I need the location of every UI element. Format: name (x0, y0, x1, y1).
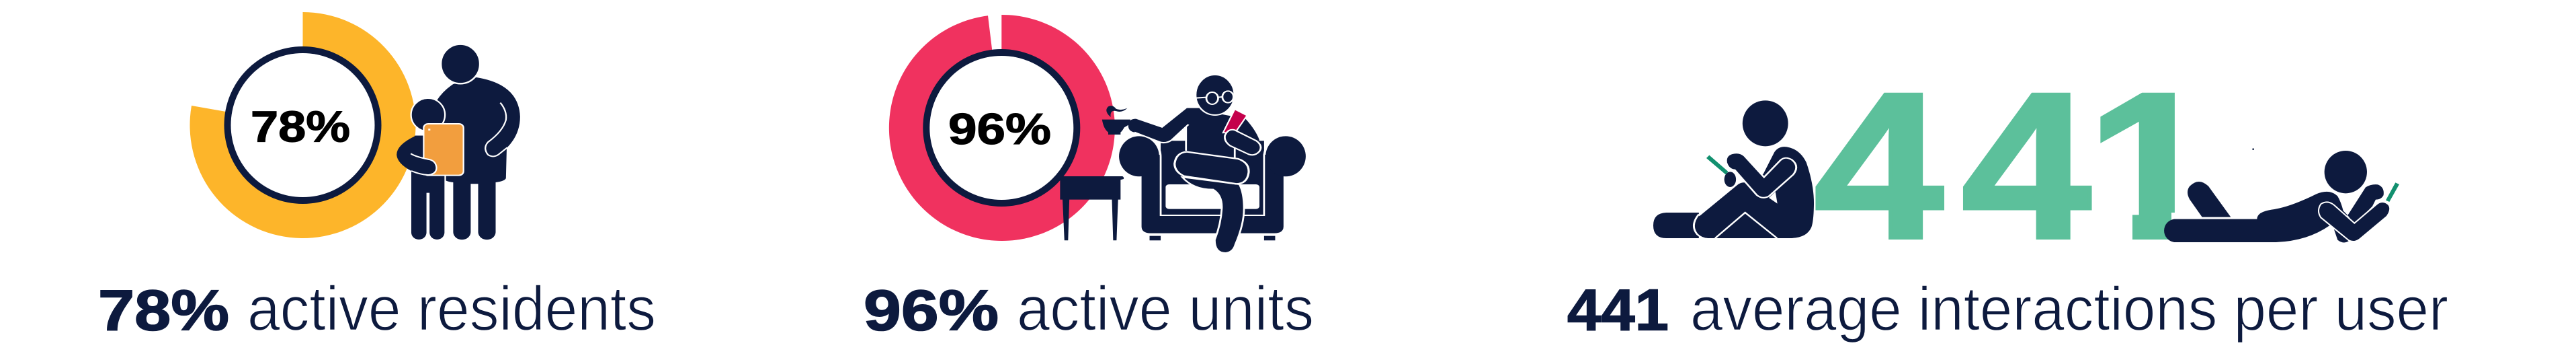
caption: 78% active residents: 78% (98, 279, 229, 343)
icon: adult and child with tablet (397, 44, 520, 240)
torso (1187, 108, 1259, 161)
donut chart: 96%: 96% (948, 104, 1051, 153)
phone (1706, 155, 1728, 174)
forearm holding phone (1224, 130, 1261, 155)
caption: 441 average interactions per user: average interactions per user (1690, 275, 2448, 343)
donut chart: 78% (190, 12, 415, 238)
panel: active residents (98, 12, 656, 343)
phone (1223, 109, 1247, 133)
donut chart: 96% (889, 15, 1115, 241)
upper leg (1175, 152, 1249, 184)
icon: person in armchair with coffee and phone (1060, 75, 1306, 253)
caption: 96% active units: 96% (864, 279, 999, 343)
icon: person lying down with phone (2164, 148, 2399, 242)
panel: average interactions (1567, 49, 2448, 343)
panel: active units (864, 15, 1314, 343)
side table (1060, 176, 1124, 240)
icon: person sitting with phone (1653, 100, 1814, 239)
caption: 78% active residents: active residents (247, 273, 656, 343)
arm holding cup (1128, 108, 1188, 143)
coffee cup (1102, 106, 1130, 135)
armchair (1142, 141, 1284, 233)
caption: 96% active units (864, 273, 1314, 343)
head and glasses (1196, 75, 1235, 115)
lower leg (1182, 177, 1244, 253)
big number: 441: 441 (1814, 49, 2216, 282)
caption: 441 average interactions per user: 441 (1567, 277, 1669, 343)
donut chart: 78%: 78% (251, 102, 350, 151)
caption: 96% active units: active units (1017, 273, 1314, 343)
